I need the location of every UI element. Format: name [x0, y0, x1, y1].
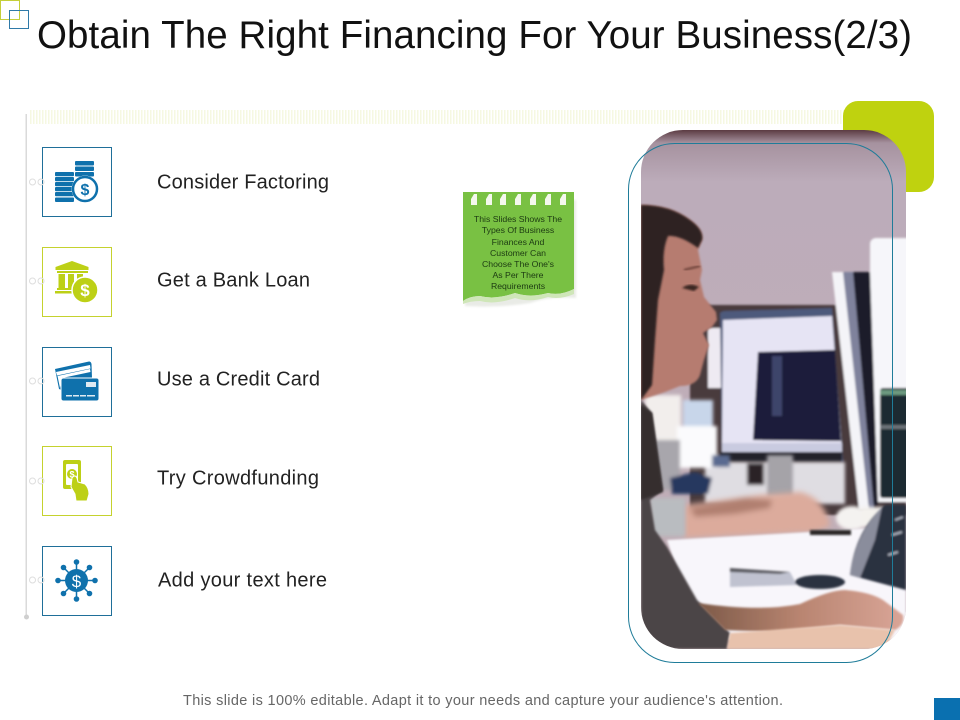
- note text: [474, 214, 562, 291]
- note text: Customer Can: [490, 248, 546, 258]
- label: Use a Credit Card: [157, 368, 320, 390]
- timeline line: [24, 114, 29, 620]
- hair, face and neck: [641, 205, 717, 400]
- icon: dollar network: [55, 559, 98, 602]
- note text: Requirements: [491, 281, 546, 291]
- hair and sweater: [641, 400, 730, 649]
- note text: Finances And: [492, 237, 544, 247]
- icon: coins: $: [81, 182, 90, 199]
- item 4: crowdfunding: [30, 446, 319, 516]
- icon: dollar network: $: [72, 572, 82, 591]
- icon: bank with coin: $: [80, 281, 90, 300]
- footer note: This slide is 100% editable. Adapt it to your needs and capture your audience's attention.: [183, 693, 783, 709]
- icon: bank with coin: [55, 261, 98, 303]
- label: Consider Factoring: [157, 172, 329, 194]
- item 3: credit card: [30, 348, 320, 416]
- corner square: [934, 698, 960, 720]
- note text: As Per There: [492, 270, 544, 280]
- photo outline frame: [628, 144, 892, 662]
- item 1: consider factoring: [30, 148, 329, 216]
- icon: hand holding banknote: $: [69, 470, 75, 480]
- perforation tabs: [471, 194, 566, 205]
- background dark: [690, 305, 906, 515]
- second monitor: [852, 270, 880, 506]
- item 2: bank loan: [30, 248, 310, 316]
- note text: Choose The One's: [482, 259, 555, 269]
- foreground forearms: [698, 590, 903, 632]
- photo: woman at computer: [641, 130, 930, 649]
- first monitor: [708, 328, 722, 388]
- icon: credit cards: [55, 362, 99, 401]
- note text: This Slides Shows The: [474, 214, 562, 224]
- label: Get a Bank Loan: [157, 270, 310, 292]
- decorative stripe band: [30, 110, 845, 124]
- label: Add your text here: [158, 570, 327, 592]
- icon: hand holding banknote: [63, 460, 89, 501]
- green accent square: [843, 101, 934, 192]
- title: Obtain The Right Financing For Your Business(2/3): [37, 14, 912, 57]
- logo squares: [0, 0, 28, 28]
- label: Try Crowdfunding: [157, 468, 319, 490]
- blurred mid-ground forearms: [684, 492, 830, 538]
- papers and phone: [730, 505, 906, 590]
- sticky note: [463, 192, 576, 307]
- third monitor: [868, 236, 906, 504]
- blurred background below monitor: [645, 395, 845, 504]
- desk surface: [667, 528, 906, 640]
- note text: Types Of Business: [482, 225, 555, 235]
- item 5: add your text: [30, 546, 327, 616]
- icon: coins: [55, 161, 98, 202]
